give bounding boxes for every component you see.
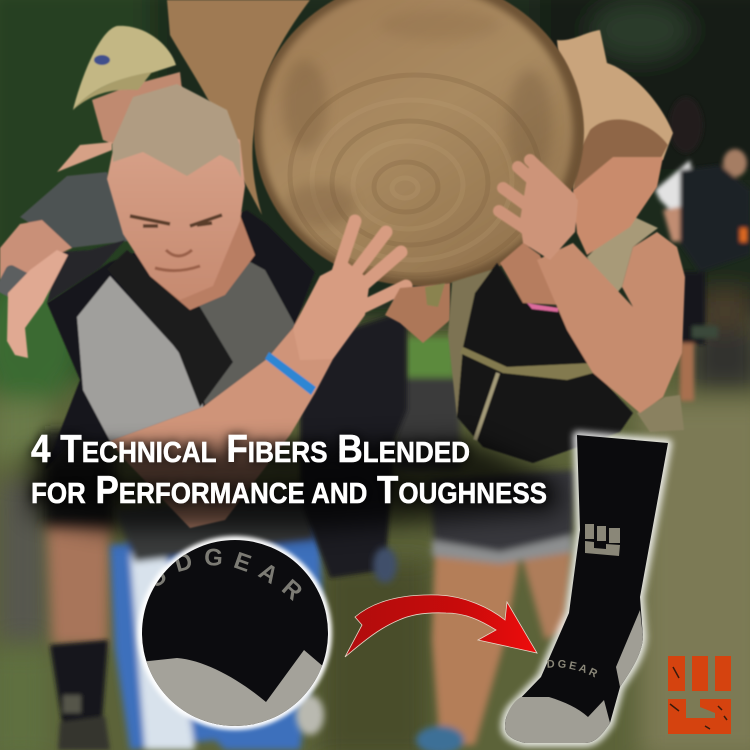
black backpack: [45, 210, 315, 470]
dark torso of t-shirt: [190, 258, 295, 405]
hair: [112, 84, 241, 178]
red curved arrow: [345, 595, 537, 657]
log: [167, 0, 584, 286]
pink bra strap: [527, 303, 558, 312]
sock logo: [585, 524, 620, 556]
khaki cap: [73, 26, 176, 110]
pack strap: [475, 373, 498, 440]
forearm: [110, 328, 333, 528]
backpack strap: [107, 250, 233, 407]
woman's legs and shorts: [416, 470, 575, 750]
tan vest on shoulder: [587, 215, 658, 293]
close-up woven brand text: UDGEAR: [156, 548, 302, 601]
blue shorts: [110, 490, 322, 750]
grey toe: [505, 697, 610, 743]
shadow band behind title: [30, 440, 560, 530]
chest skin: [500, 243, 560, 305]
head: [107, 100, 245, 300]
log cross-section: [254, 0, 584, 286]
log bark side: [167, 0, 310, 215]
black tank top: [457, 263, 633, 463]
neck: [150, 215, 255, 310]
lower-left blurred legs: [45, 430, 115, 645]
tan pack side: [448, 268, 497, 417]
left black sock and shoe: [50, 640, 110, 750]
face: [573, 157, 663, 255]
background man in cap: [0, 26, 182, 358]
grey heel: [616, 610, 643, 687]
corner brand logo: [668, 656, 731, 734]
dark clothing of figure behind: [296, 310, 407, 735]
hand on log: [293, 221, 406, 360]
nose and mouth shading: [155, 250, 200, 271]
grass patch and tarmac behind figures: [395, 337, 460, 470]
other person's arm: [385, 283, 450, 343]
waist belt: [460, 347, 593, 380]
brand text on sock: DGEAR: [547, 660, 598, 678]
woman's hair behind the log: [557, 30, 673, 190]
light grey sleeve: [77, 276, 203, 441]
woman: [448, 157, 685, 463]
product sock: [496, 426, 676, 750]
title: [31, 428, 547, 512]
forearm and hand: [0, 220, 72, 282]
eyes and brows: [130, 215, 222, 226]
grey heel knit: [146, 650, 322, 726]
arm: [537, 232, 685, 413]
title line 2: FOR PERFORMANCE AND TOUGHNESS: [31, 469, 547, 512]
main man: [45, 84, 450, 528]
pack low right: [637, 395, 684, 432]
hand on log: [499, 160, 578, 260]
circular sock close-up: [135, 532, 336, 734]
background hikers on the right: [655, 97, 750, 401]
title line 1: 4 TECHNICAL FIBERS BLENDED: [31, 428, 470, 471]
blue wristband: [265, 352, 316, 395]
